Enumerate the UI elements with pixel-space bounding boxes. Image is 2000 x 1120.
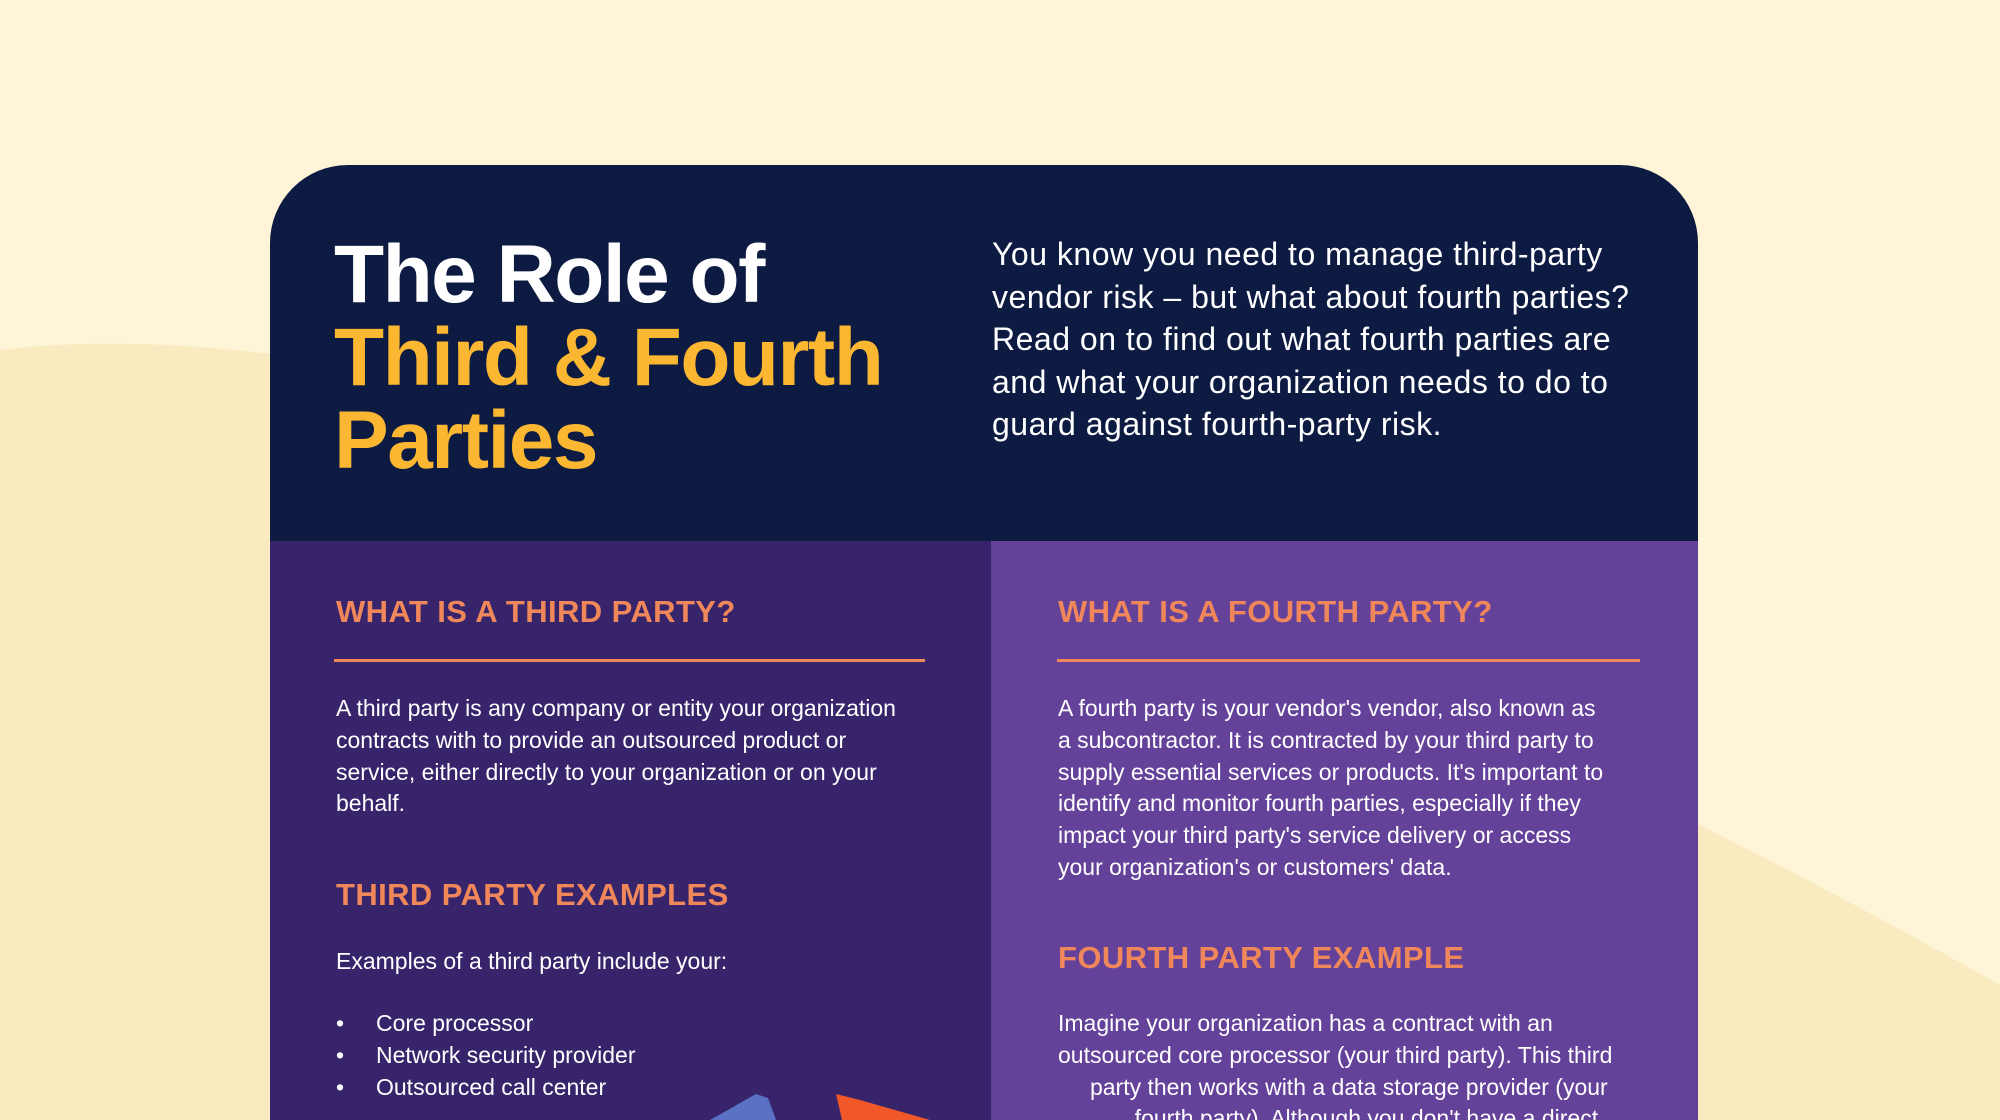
- text: third party definition: A third party is any company or entity your organization: [336, 695, 896, 721]
- text: examples intro: Examples of a third party include your:: [336, 948, 727, 974]
- panel: left purple: [270, 541, 991, 1120]
- text: fourth party definition: supply essential services or products. It's important to: [1058, 759, 1603, 785]
- text: fourth party definition: impact your third party's service delivery or access: [1058, 822, 1571, 848]
- text: third party definition: behalf.: [336, 790, 405, 816]
- text: fourth party definition: A fourth party is your vendor's vendor, also known as: [1058, 695, 1596, 721]
- intro text: vendor risk – but what about fourth parties?: [992, 278, 1629, 314]
- text: fourth party example: Imagine your organization has a contract with an: [1058, 1010, 1553, 1036]
- text: third party definition: service, either directly to your organization or on your: [336, 759, 877, 785]
- text: third party definition: [336, 695, 896, 816]
- title: The Role of: [334, 229, 764, 320]
- text: fourth party definition: identify and monitor fourth parties, especially if they: [1058, 790, 1581, 816]
- heading: fourth party example: FOURTH PARTY EXAMPLE: [1058, 940, 1464, 975]
- panel: right purple: [991, 541, 1698, 1120]
- heading: third party examples: THIRD PARTY EXAMPLES: [336, 877, 729, 912]
- title: Parties: [334, 395, 597, 486]
- intro text: You know you need to manage third-party: [992, 236, 1603, 272]
- list: examples: [336, 1010, 636, 1100]
- icon: decorative shapes: [710, 1094, 930, 1120]
- title: [334, 229, 882, 486]
- heading: fourth party: WHAT IS A FOURTH PARTY?: [1058, 594, 1493, 629]
- heading: third party: WHAT IS A THIRD PARTY?: [336, 594, 736, 629]
- text: fourth party example: [1058, 1010, 1612, 1120]
- text: fourth party definition: [1058, 695, 1603, 880]
- card: [270, 165, 1698, 1120]
- intro text: Read on to find out what fourth parties are: [992, 321, 1611, 357]
- title: Third & Fourth: [334, 312, 882, 403]
- list: examples: • Outsourced call center: [336, 1074, 606, 1100]
- text: fourth party definition: a subcontractor. It is contracted by your third party to: [1058, 727, 1594, 753]
- text: fourth party definition: your organization's or customers' data.: [1058, 854, 1452, 880]
- intro text: guard against fourth-party risk.: [992, 406, 1442, 442]
- text: fourth party example: outsourced core processor (your third party). This third: [1058, 1042, 1612, 1068]
- list: examples: • Network security provider: [336, 1042, 635, 1068]
- text: third party definition: contracts with to provide an outsourced product or: [336, 727, 846, 753]
- intro text: and what your organization needs to do to: [992, 364, 1608, 400]
- text: fourth party example: party then works with a data storage provider (your: [1090, 1074, 1608, 1100]
- intro text: [992, 236, 1629, 442]
- list: examples: • Core processor: [336, 1010, 533, 1036]
